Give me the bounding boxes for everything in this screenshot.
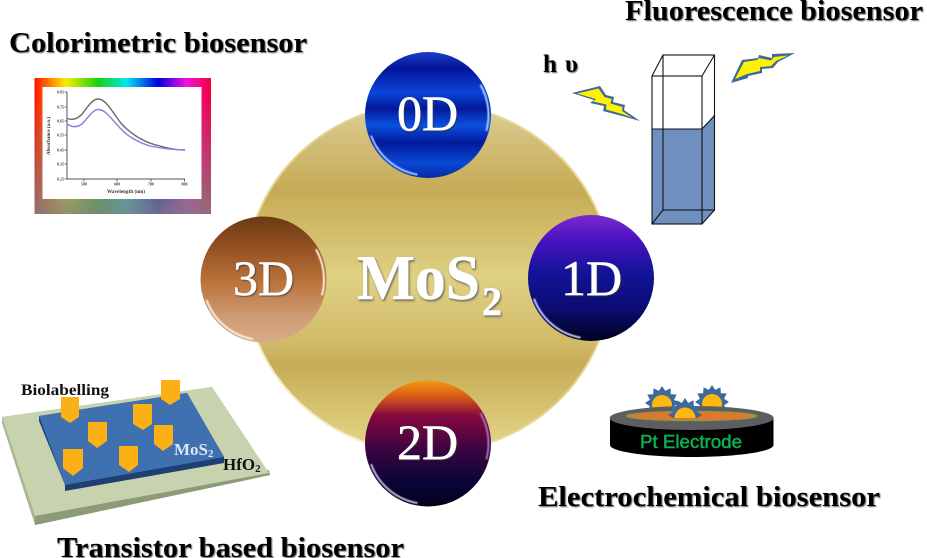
panel: colorimetric absorbance chart: 0.45 (57, 148, 64, 152)
panel: colorimetric absorbance chart: 0.75 (57, 104, 64, 110)
node: 1D (528, 215, 654, 341)
panel: colorimetric absorbance chart: 0.55 (57, 132, 64, 138)
biolabelling tags (61, 380, 180, 476)
panel: colorimetric absorbance chart (34, 78, 211, 214)
label: Biolabelling: Biolabelling (21, 382, 109, 399)
node: 1D: 1D (561, 250, 622, 306)
label: h nu: h υ (543, 51, 578, 78)
node: 3D (200, 216, 326, 342)
icon: left lightning bolt (572, 86, 640, 121)
panel: colorimetric absorbance chart: Wavelength (nm) (107, 188, 145, 195)
panel: colorimetric absorbance chart: 0.35 (57, 162, 64, 166)
node: 3D: 3D (233, 250, 294, 306)
label: HfO2 layer: HfO (223, 455, 255, 474)
label: MoS2: MoS (357, 242, 480, 313)
node: 0D (365, 52, 491, 178)
node: 0D: 0D (397, 85, 458, 141)
label: HfO2 layer: 2 (255, 463, 261, 475)
panel: colorimetric absorbance chart: 700 (148, 182, 154, 186)
panel: colorimetric absorbance chart: 800 (182, 182, 188, 186)
panel: colorimetric absorbance chart: Absorbance (a.u.) (45, 117, 52, 155)
back nanoparticle stars (645, 385, 729, 408)
panel: colorimetric absorbance chart: 0.25 (57, 176, 64, 182)
panel: colorimetric absorbance chart: 0.65 (57, 118, 64, 124)
panel: colorimetric absorbance chart: 600 (114, 182, 120, 186)
panel: Pt electrode (610, 385, 774, 457)
panel: transistor device (2, 380, 270, 525)
node: 2D: 2D (397, 414, 458, 470)
label: MoS2 layer: MoS (174, 440, 208, 459)
central MoS2 disc (245, 103, 611, 453)
panel: colorimetric absorbance chart: 0.85 (57, 90, 64, 94)
node: 2D (365, 380, 491, 506)
panel: colorimetric absorbance chart: 500 (81, 182, 87, 186)
heading: Colorimetric biosensor: Colorimetric biosensor (9, 28, 307, 59)
label: Pt Electrode: Pt Electrode (640, 432, 742, 452)
icon: right lightning bolt (731, 53, 795, 83)
icon: cuvette (652, 55, 715, 224)
label: MoS2: 2 (482, 279, 502, 324)
front nanoparticle star (668, 398, 702, 418)
label: MoS2 layer: 2 (208, 448, 214, 460)
heading: Electrochemical biosensor: Electrochemical biosensor (538, 482, 880, 513)
